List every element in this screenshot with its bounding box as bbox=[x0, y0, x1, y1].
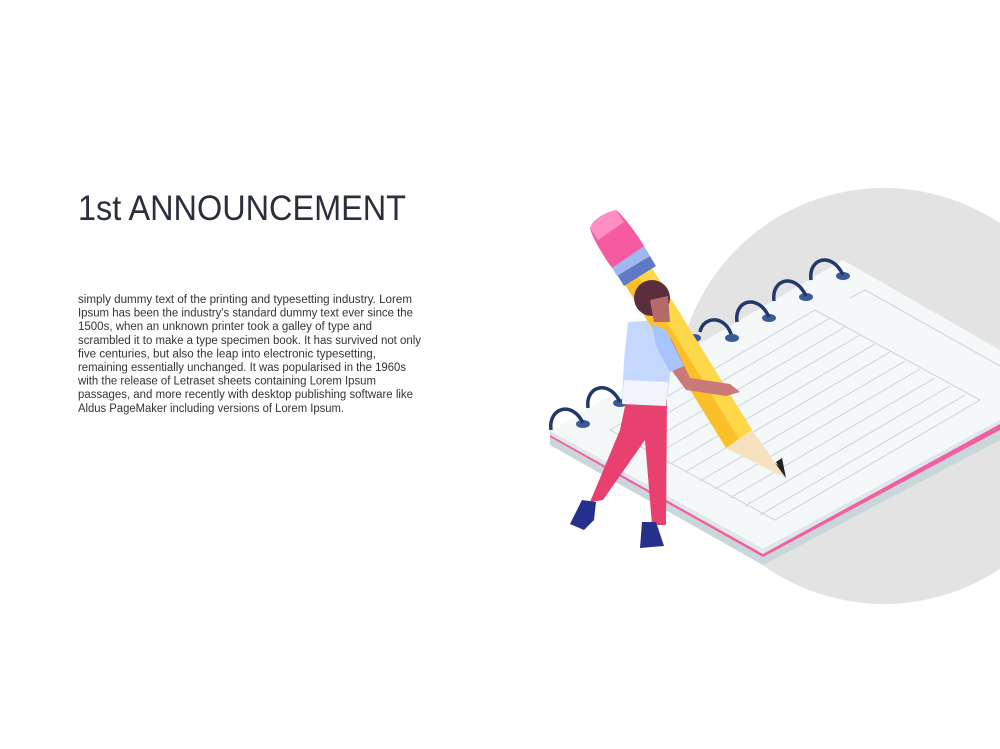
pencil bbox=[590, 210, 786, 478]
body text: passages, and more recently with desktop publishing software like bbox=[78, 389, 413, 401]
body text: with the release of Letraset sheets containing Lorem Ipsum bbox=[77, 376, 376, 388]
title: 1st ANNOUNCEMENT bbox=[78, 189, 406, 228]
body text bbox=[77, 294, 421, 415]
notebook bbox=[550, 260, 1000, 565]
shirt bbox=[622, 320, 672, 406]
head bbox=[634, 280, 670, 316]
shoes bbox=[570, 500, 596, 530]
body text: Aldus PageMaker including versions of Lorem Ipsum. bbox=[78, 403, 344, 415]
body text: scrambled it to make a type specimen book. It has survived not only bbox=[78, 335, 421, 347]
legs bbox=[590, 392, 667, 525]
body text: remaining essentially unchanged. It was popularised in the 1960s bbox=[78, 362, 406, 374]
woman with pencil bbox=[570, 210, 786, 548]
body text: five centuries, but also the leap into electronic typesetting, bbox=[78, 348, 376, 360]
body text: 1500s, when an unknown printer took a galley of type and bbox=[78, 321, 372, 333]
arm bbox=[656, 330, 740, 396]
body text: simply dummy text of the printing and typesetting industry. Lorem bbox=[78, 294, 412, 306]
body text: Ipsum has been the industry's standard dummy text ever since the bbox=[78, 308, 413, 320]
ruled lines bbox=[610, 290, 1000, 520]
background circle bbox=[676, 188, 1000, 604]
spiral rings bbox=[551, 260, 850, 430]
